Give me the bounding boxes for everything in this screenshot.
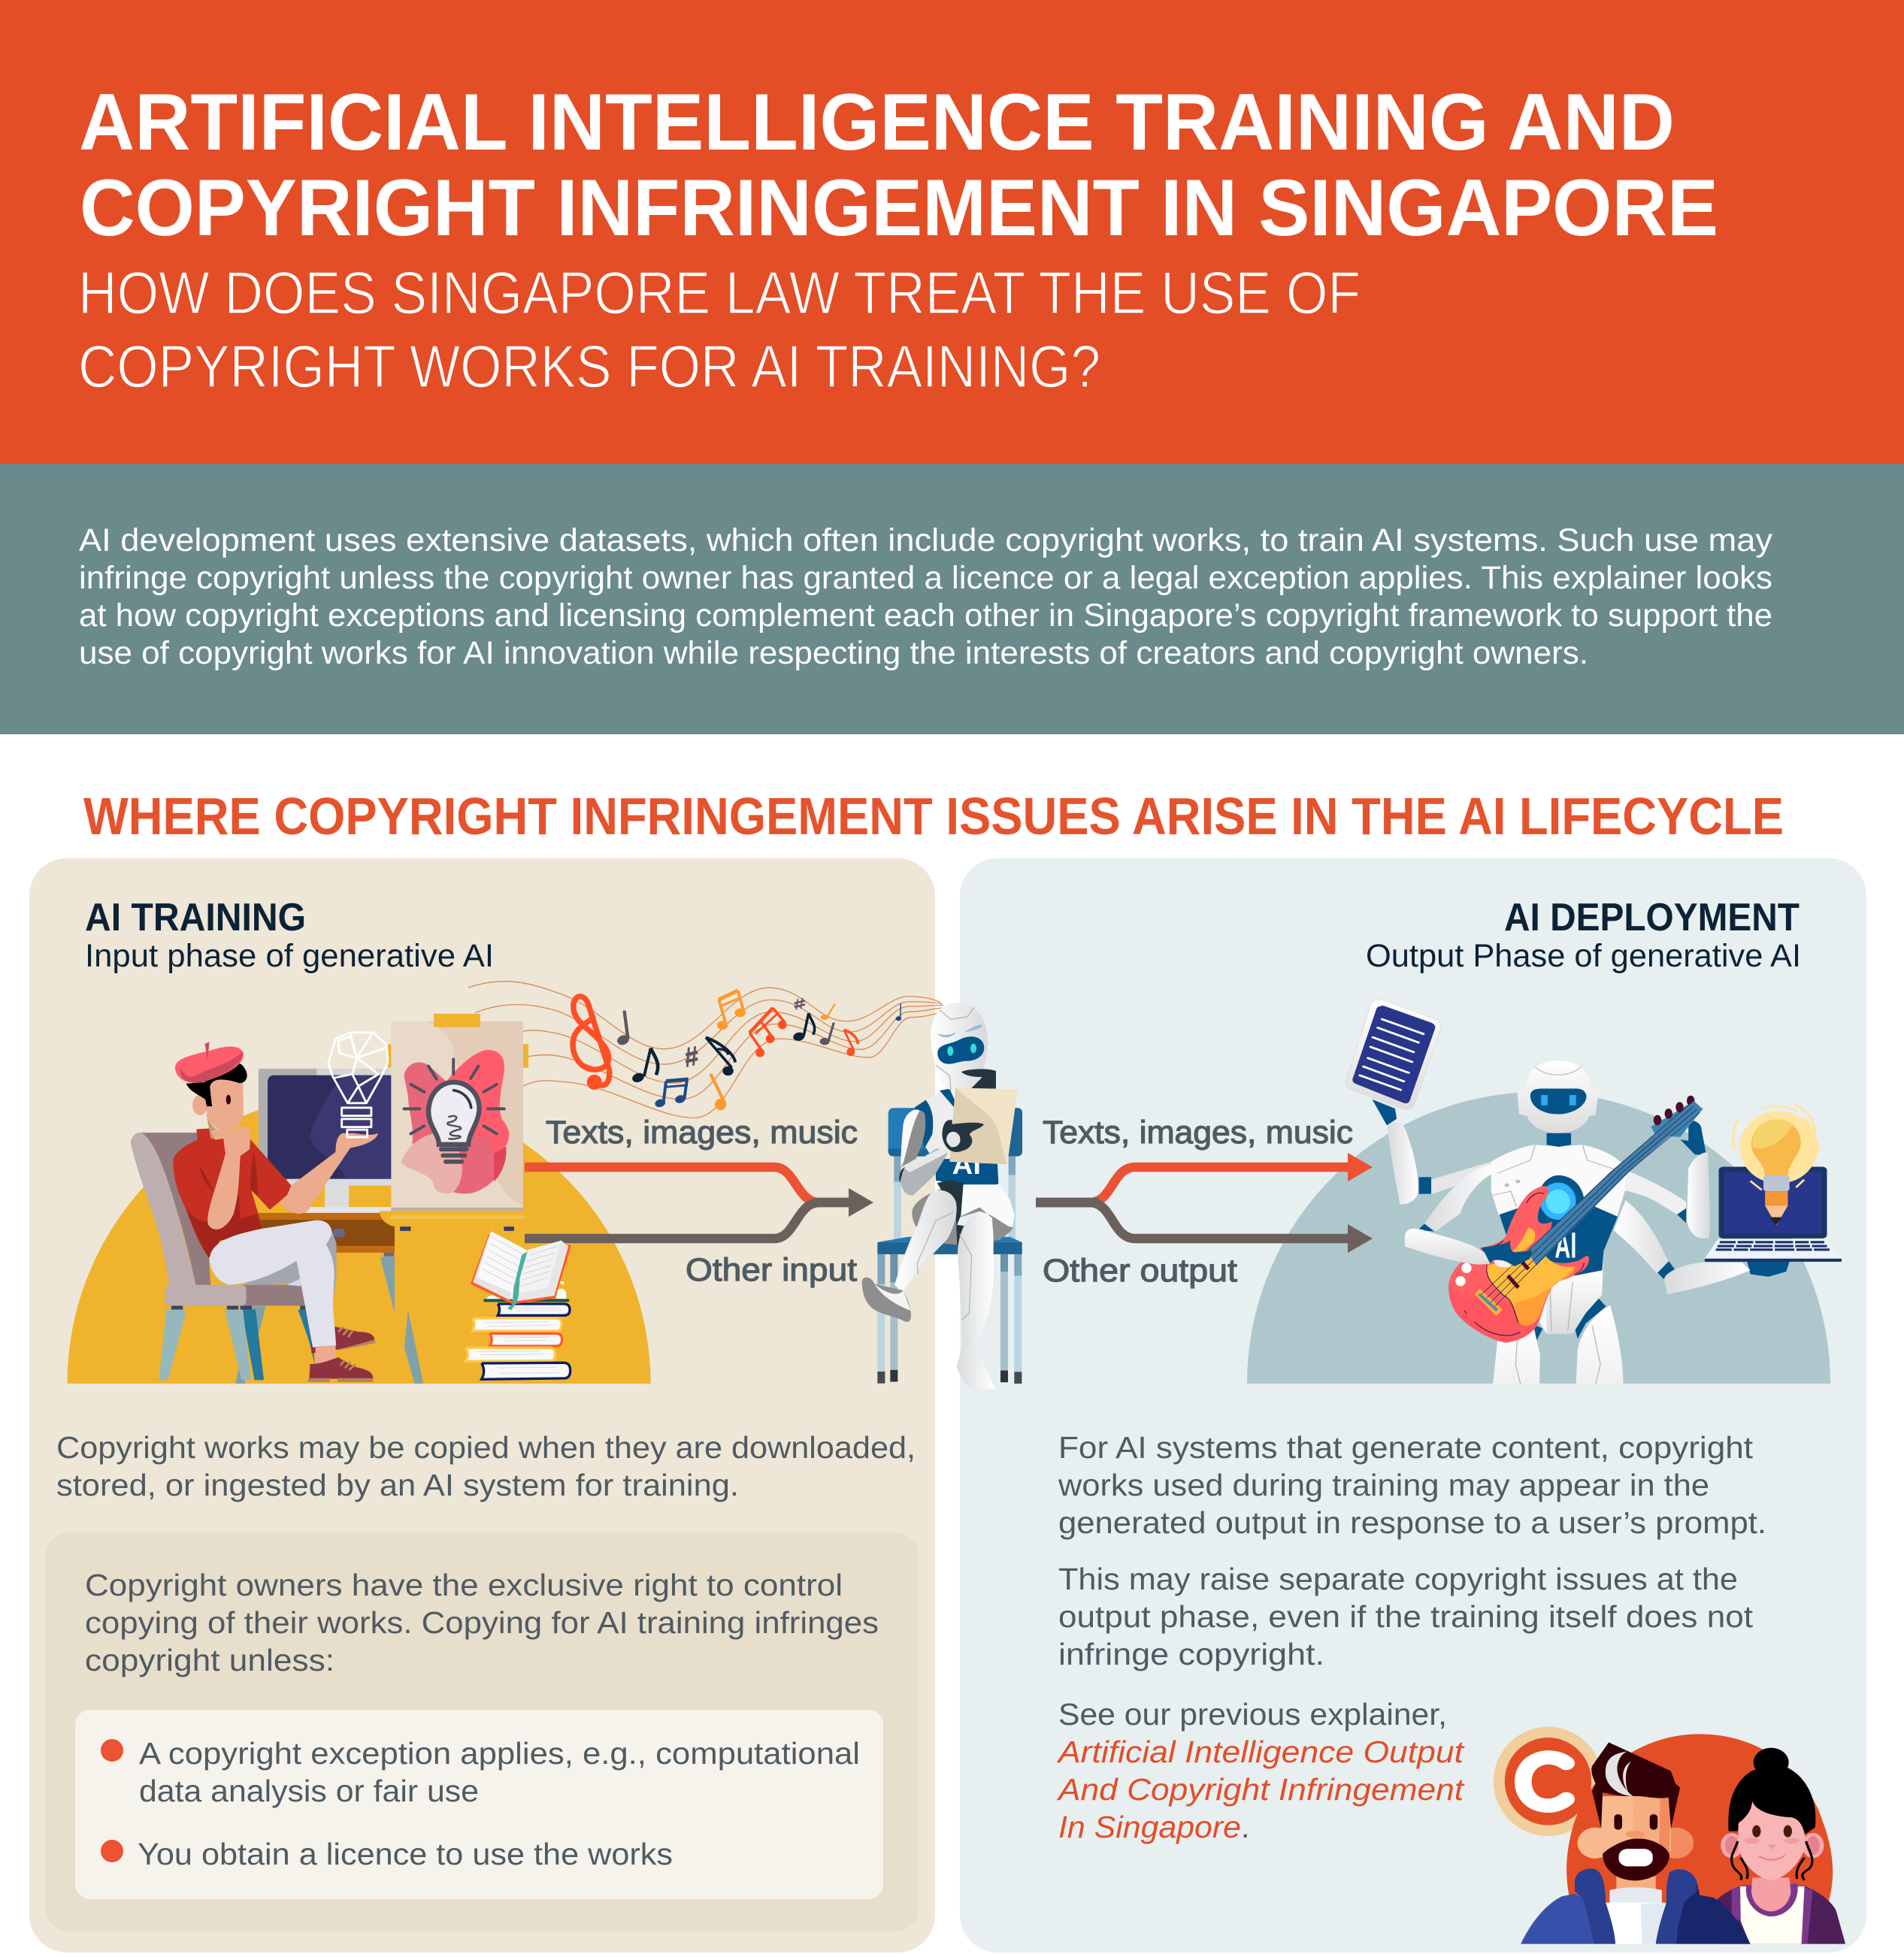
icon: glowing bulb pencil: [1733, 1104, 1819, 1226]
right panel text: previous explainer: And Copyright Infringement: [1056, 1772, 1465, 1807]
right panel text: separate issues: This may raise separate copyright issues at the: [1058, 1562, 1738, 1596]
heading: AI training: [85, 896, 494, 974]
woman: [1715, 1748, 1845, 1944]
illustration: guitar and playing arm: [1405, 1101, 1701, 1343]
shoes: [311, 1326, 374, 1354]
legs: [1493, 1295, 1623, 1384]
chair: [877, 1108, 1022, 1384]
icon: navy eighth note 2: [793, 1013, 815, 1042]
right raised arm: [1621, 1121, 1710, 1239]
desk: [255, 1213, 423, 1384]
robot body: [862, 1003, 1018, 1391]
icon: copyright symbol: [1494, 1727, 1603, 1836]
illustration: laptop and bulb: [1705, 1104, 1842, 1262]
subtitle: COPYRIGHT WORKS FOR AI TRAINING?: [78, 333, 1100, 400]
stack of books: [465, 1231, 571, 1379]
icon: navy tilted note: [706, 1037, 735, 1075]
chair: [131, 1133, 315, 1384]
head: [1518, 1060, 1599, 1133]
icon: light bulb: [404, 1060, 504, 1162]
red backdrop: [1566, 1734, 1833, 1904]
icon: treble clef: [573, 997, 610, 1085]
icon: red flag note: [844, 1030, 858, 1056]
AI chest text: AI: [1554, 1226, 1576, 1266]
icon: navy eighth note: [631, 1048, 658, 1084]
hill: blue semicircle: [1247, 1092, 1830, 1384]
icon: blue beamed note: [654, 1079, 689, 1108]
hand: [942, 1120, 984, 1152]
heading: AI deployment: AI DEPLOYMENT: [1504, 896, 1800, 939]
playing hand: [1482, 1241, 1532, 1267]
left panel text: copying: Copyright works may be copied when they are downloaded,: [56, 1430, 916, 1465]
illustration: artist at desk with poster: [131, 1014, 528, 1384]
guitar neck: [1482, 1101, 1701, 1306]
subtitle: HOW DOES SINGAPORE LAW TREAT THE USE OF: [78, 259, 1361, 326]
heading: AI deployment: Output Phase of generative AI: [1366, 938, 1801, 974]
intro band: [0, 464, 1904, 734]
torso: [1491, 1133, 1627, 1334]
intro text: infringe copyright unless the copyright owner has granted a licence or a legal exception applies. This explainer looks: [79, 560, 1772, 596]
hill: yellow semicircle: [68, 1092, 651, 1384]
inner panel: exclusive right: Copyright owners have the exclusive right to control: [85, 1568, 843, 1602]
right panel text: output: For AI systems that generate content, copyright: [1058, 1430, 1754, 1465]
panel: AI training background: [29, 858, 935, 1952]
heading: AI training: Input phase of generative AI: [85, 938, 494, 974]
arrow: splitting output arrows: [1036, 1153, 1373, 1253]
illustration: multi-armed robot: [1346, 1000, 1790, 1384]
raised arm with sheet: [1346, 1000, 1496, 1204]
illustration: copyright symbol and two people: [1494, 1727, 1845, 1944]
right panel text: output: works used during training may appear in the: [1058, 1468, 1709, 1502]
labels: output: Other output: [1043, 1253, 1237, 1289]
title: [79, 77, 1718, 253]
right panel text: separate issues: infringe copyright.: [1058, 1637, 1324, 1671]
heading: AI deployment: [1366, 896, 1801, 974]
icon: small orange note: [821, 1004, 835, 1020]
right panel text: previous explainer: See our previous explainer,: [1058, 1697, 1447, 1732]
right panel text: separate issues: [1058, 1562, 1754, 1671]
intro text: use of copyright works for AI innovation while respecting the interests of creators and copyright owners.: [79, 635, 1588, 671]
poster: [380, 1014, 528, 1311]
title: ARTIFICIAL INTELLIGENCE TRAINING AND: [79, 77, 1675, 167]
icon: laptop: [1705, 1166, 1842, 1262]
icon: sharp sign: [686, 1046, 698, 1067]
open book: [471, 1231, 571, 1310]
icon: red beamed note: [749, 1008, 786, 1057]
arrow: merging input arrows: [525, 1167, 873, 1239]
heading: AI training: AI TRAINING: [85, 896, 306, 939]
guitar body: [1448, 1186, 1589, 1343]
right panel text: previous explainer: .: [1241, 1810, 1249, 1844]
right panel text: previous explainer: In Singapore: [1058, 1810, 1241, 1844]
labels: input: Other input: [686, 1252, 857, 1288]
monitor: [259, 1069, 392, 1213]
right panel text: output: generated output in response to a user’s prompt.: [1058, 1505, 1766, 1540]
icon: orange note: [711, 1075, 726, 1110]
paper: [949, 1087, 1018, 1164]
icon: geometric bulb: [328, 1033, 388, 1137]
intro text: at how copyright exceptions and licensing complement each other in Singapore’s copyright framework to support the: [79, 597, 1772, 634]
bullet 2: You obtain a licence to use the works: [138, 1837, 673, 1871]
right panel text: separate issues: output phase, even if the training itself does not: [1058, 1599, 1754, 1634]
icon: orange beamed note: [717, 991, 746, 1030]
man: [173, 1042, 378, 1382]
music staves and notes: [468, 982, 943, 1118]
bullet 1: [101, 1736, 860, 1808]
bullet box: [75, 1710, 883, 1899]
labels: input: Texts, images, music: [546, 1115, 858, 1151]
labels: output: [1043, 1115, 1353, 1289]
intro text: AI development uses extensive datasets, which often include copyright works, to train AI systems. Such use may: [79, 522, 1773, 558]
bullet 1: data analysis or fair use: [139, 1774, 479, 1808]
icon: small sharp: [795, 998, 805, 1010]
right panel text: previous explainer: [1056, 1697, 1465, 1844]
inner panel: exclusive right: copyright unless:: [85, 1643, 334, 1677]
lower arms: [1418, 1164, 1790, 1294]
trousers: [325, 1230, 336, 1345]
panel: AI deployment background: [960, 858, 1866, 1952]
labels: output: Texts, images, music: [1043, 1115, 1353, 1151]
right panel text: output: [1058, 1430, 1766, 1540]
inner panel: exclusive right: [45, 1532, 919, 1931]
hair: [186, 1063, 247, 1106]
illustration: seated robot reading: [862, 1003, 1022, 1391]
title: COPYRIGHT INFRINGEMENT IN SINGAPORE: [80, 162, 1718, 253]
guitar headstock: [1651, 1096, 1703, 1137]
front leg: [958, 1212, 994, 1350]
arm and hand: [279, 1133, 378, 1214]
head: [931, 1003, 988, 1092]
forearm: [1405, 1229, 1491, 1265]
intro text: [79, 522, 1773, 671]
crossed leg: [894, 1190, 957, 1292]
arm to chin: [207, 1127, 250, 1230]
right panel text: previous explainer: Artificial Intelligence Output: [1056, 1735, 1465, 1769]
AI chest text: AI: [952, 1151, 981, 1180]
beret: [175, 1046, 244, 1083]
left panel text: copying: [56, 1430, 916, 1502]
labels: input: [546, 1115, 858, 1288]
neck and face: [207, 1116, 229, 1139]
left panel text: copying: stored, or ingested by an AI system for training.: [56, 1468, 739, 1502]
icon: small gray note: [820, 1023, 834, 1045]
bullet 1: A copyright exception applies, e.g., computational: [139, 1736, 860, 1771]
inner panel: exclusive right: copying of their works. Copying for AI training infringes: [85, 1605, 879, 1640]
header band: [0, 0, 1904, 464]
shirt: [173, 1128, 291, 1258]
subtitle: [78, 259, 1361, 400]
icon: small blue note: [896, 1003, 901, 1021]
man with beard: [1521, 1742, 1751, 1944]
icon: gray note: [616, 1012, 630, 1046]
